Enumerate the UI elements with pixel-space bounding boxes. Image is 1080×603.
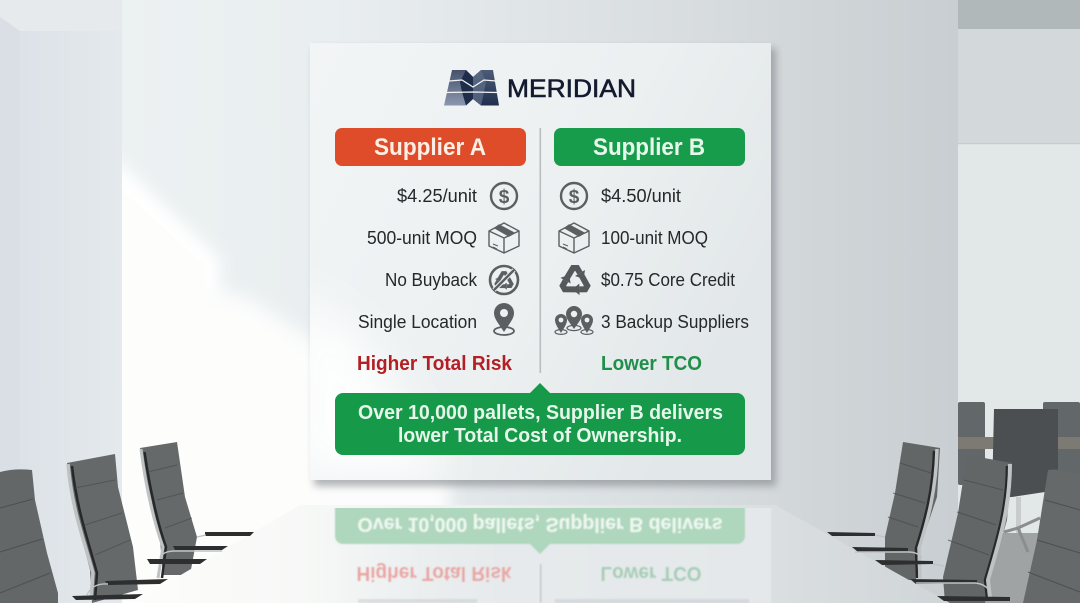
callout: conclusion: lower Total Cost of Ownership. (398, 425, 682, 447)
conference table (133, 505, 950, 603)
verdict: Supplier A: Higher Total Risk (357, 353, 513, 375)
callout: conclusion: Over 10,000 pallets, Supplier B delivers (358, 402, 723, 424)
row B: price (561, 183, 681, 209)
panel reflection on table: Over 10,000 pallets, Supplier B delivers (358, 513, 722, 535)
row A: price: $4.25/unit (397, 185, 477, 206)
row A: no buyback (385, 266, 518, 294)
right chairs (885, 442, 1080, 603)
row B: minimum order: 100-unit MOQ (601, 227, 708, 248)
row A: no buyback: No Buyback (385, 269, 478, 290)
callout: conclusion (335, 383, 745, 455)
comparison panel (290, 43, 771, 480)
left chairs (0, 442, 197, 603)
row B: price: $4.50/unit (601, 185, 681, 206)
row B: core credit: $0.75 Core Credit (601, 269, 735, 290)
header: Supplier B (554, 128, 745, 166)
header: Supplier B: Supplier B (593, 134, 705, 161)
row B: backup suppliers: 3 Backup Suppliers (601, 311, 749, 332)
panel reflection on table: Lower TCO (600, 562, 702, 584)
row B: minimum order (559, 223, 708, 253)
logo mark (444, 70, 499, 106)
verdict: Supplier B: Lower TCO (601, 353, 702, 375)
row B: price: $ (569, 187, 580, 208)
logo: Meridian (444, 70, 636, 106)
panel shadow (314, 48, 776, 486)
row A: price (397, 183, 517, 209)
header: Supplier A: Supplier A (374, 134, 486, 161)
row B: backup suppliers (555, 306, 749, 334)
background room: far table and chairs (958, 402, 1080, 603)
header: Supplier A (335, 128, 526, 166)
logo wordmark: MERIDIAN (507, 75, 636, 103)
panel reflection on table (334, 508, 770, 603)
row B: core credit (559, 268, 735, 296)
row A: minimum order (367, 223, 519, 253)
center divider (540, 128, 541, 373)
row A: single location: Single Location (358, 311, 477, 332)
chair armrests (72, 532, 1010, 601)
row A: single location (358, 303, 514, 335)
row A: price: $ (499, 187, 510, 208)
panel reflection on table: Higher Total Risk (356, 562, 512, 584)
row A: minimum order: 500-unit MOQ (367, 227, 477, 248)
